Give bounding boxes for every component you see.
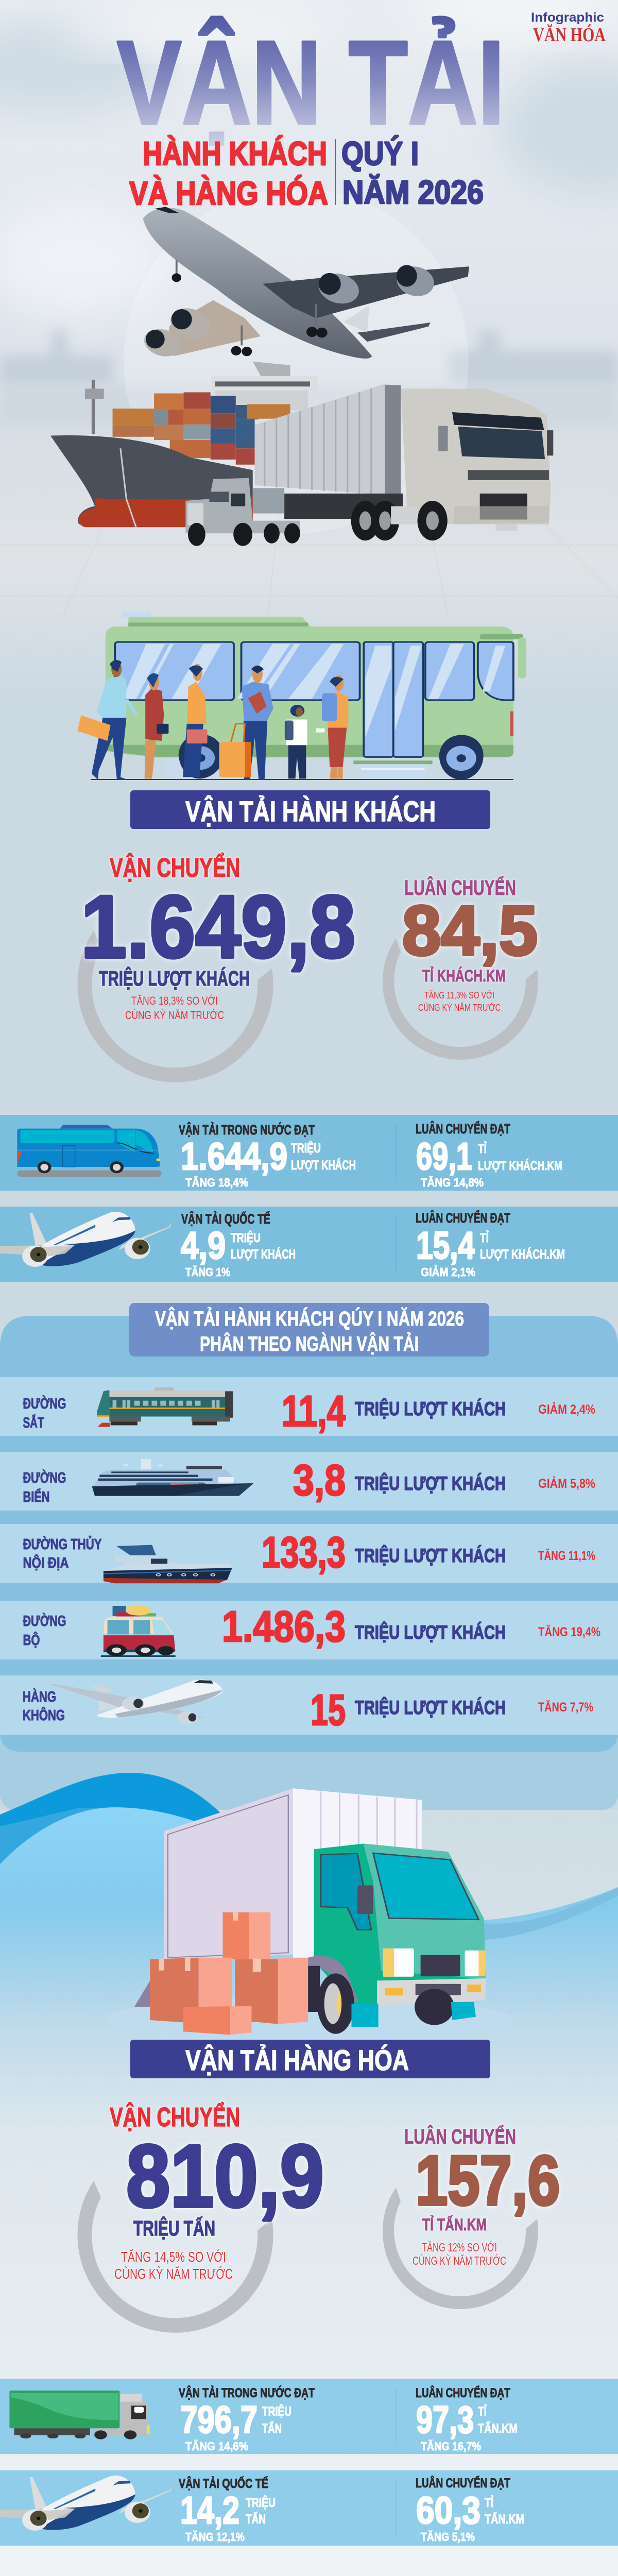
logo: Infographic Văn Hóa	[531, 10, 606, 46]
band: international passenger transport: TRIỆU	[231, 1230, 261, 1245]
band: domestic passenger transport: TỈ	[478, 1141, 487, 1156]
hero background	[0, 0, 618, 701]
section header: passenger transport: VẬN TẢI HÀNH KHÁCH	[185, 795, 436, 827]
subtitle: passengers and goods: VÀ HÀNG HÓA	[129, 175, 328, 212]
illustration: delivery truck with boxes	[134, 1788, 486, 2035]
icon: jet airliner	[0, 2476, 171, 2531]
icon: van	[101, 1605, 176, 1657]
section header: freight transport	[130, 2040, 490, 2078]
row: road: BỘ	[23, 1631, 40, 1649]
stat: freight volume: VẬN CHUYỂN	[110, 2102, 240, 2132]
band: domestic passenger transport: LUÂN CHUYỂN ĐẠT	[416, 1121, 510, 1137]
stat: freight turnover: TỈ TẤN.KM	[422, 2215, 487, 2234]
subtitle: period: QUÝ I	[341, 135, 419, 172]
band: international passenger transport: TỈ	[480, 1230, 489, 1245]
ring: passenger turnover	[383, 938, 538, 1060]
ring: freight turnover	[383, 2188, 538, 2309]
woman in red	[145, 673, 168, 778]
panel heading: PHÂN THEO NGÀNH VẬN TẢI	[200, 1332, 419, 1355]
illustration: container truck	[255, 384, 553, 540]
stat: freight turnover: 157,6	[416, 2141, 560, 2219]
band: domestic passenger transport: LƯỢT KHÁCH	[291, 1158, 356, 1173]
section header: passenger transport	[130, 790, 490, 829]
ring: freight volume	[78, 2181, 273, 2333]
stat: passenger volume	[81, 853, 355, 1022]
illustration: green bus with passengers	[77, 612, 526, 780]
title: VẬN TẢI	[117, 16, 505, 149]
band: domestic freight transport: 97,3	[416, 2398, 474, 2441]
row: railway: GIẢM 2,4%	[538, 1401, 595, 1417]
band: international passenger transport	[0, 1207, 618, 1282]
row: sea	[0, 1452, 618, 1511]
band: domestic passenger transport: 1.644,9	[181, 1135, 287, 1178]
band: international passenger transport: GIẢM 2,1%	[421, 1264, 475, 1279]
band: international passenger transport: LUÂN CHUYỂN ĐẠT	[416, 1210, 510, 1226]
logo: Infographic Văn Hóa: Infographic	[531, 10, 604, 25]
illustration: container ship	[50, 362, 318, 528]
stat: passenger volume: 1.649,8	[81, 877, 355, 976]
row: inland waterway: ĐƯỜNG THỦY	[23, 1535, 102, 1553]
stat: freight volume	[110, 2102, 324, 2282]
band: international freight transport	[0, 2470, 618, 2546]
row: sea: 3,8	[293, 1456, 346, 1504]
section header: freight transport: VẬN TẢI HÀNG HÓA	[185, 2044, 409, 2076]
subtitle: passengers and goods: HÀNH KHÁCH	[143, 135, 327, 172]
band: international freight transport: 60,3	[416, 2489, 480, 2532]
stat: freight volume: CÙNG KỲ NĂM TRƯỚC	[114, 2266, 233, 2282]
child with backpack	[285, 705, 307, 778]
boxes	[150, 1912, 308, 2035]
band: international passenger transport: LƯỢT KHÁCH.KM	[480, 1247, 565, 1262]
stat: passenger turnover: CÙNG KỲ NĂM TRƯỚC	[418, 1002, 501, 1013]
band: domestic freight transport: TỈ	[478, 2403, 487, 2419]
row: aviation	[0, 1675, 618, 1735]
row: road	[0, 1601, 618, 1659]
illustration: cargo airplane	[140, 207, 469, 361]
row: railway: SẮT	[23, 1414, 44, 1431]
band: domestic passenger transport	[0, 1115, 618, 1191]
row: aviation: TĂNG 7,7%	[538, 1700, 593, 1715]
subtitle: period	[341, 135, 484, 211]
icon: train	[97, 1387, 233, 1427]
band: domestic freight transport: 796,7	[180, 2398, 258, 2441]
row: road: 1.486,3	[222, 1602, 346, 1651]
row: road: TĂNG 19,4%	[538, 1624, 600, 1639]
ring: passenger volume	[78, 930, 273, 1082]
row: aviation: 15	[311, 1686, 346, 1734]
band: domestic freight transport: VẬN TẢI TRONG NƯỚC ĐẠT	[179, 2385, 315, 2400]
stat: passenger volume: VẬN CHUYỂN	[110, 853, 240, 883]
band: domestic freight transport: LUÂN CHUYỂN ĐẠT	[416, 2385, 510, 2400]
band: domestic freight transport: TẤN	[262, 2421, 282, 2436]
band: international passenger transport: 15,4	[416, 1224, 475, 1267]
subtitle: passengers and goods	[129, 135, 328, 212]
row: road: ĐƯỜNG	[23, 1612, 66, 1630]
stat: freight volume: 810,9	[126, 2127, 324, 2226]
row: railway: 11,4	[282, 1387, 346, 1435]
stat: passenger volume: TRIỆU LƯỢT KHÁCH	[99, 967, 250, 990]
stat: passenger volume: TĂNG 18,3% SO VỚI	[131, 994, 218, 1007]
stat: passenger turnover: LUÂN CHUYỂN	[404, 875, 516, 900]
row: road: TRIỆU LƯỢT KHÁCH	[355, 1621, 506, 1643]
man with red bag	[183, 664, 208, 777]
row: aviation: TRIỆU LƯỢT KHÁCH	[355, 1697, 506, 1718]
band: international passenger transport: LƯỢT KHÁCH	[231, 1247, 296, 1262]
stat: passenger turnover: 84,5	[402, 891, 538, 970]
woman with backpack	[316, 675, 348, 778]
band: international freight transport: LUÂN CHUYỂN ĐẠT	[416, 2475, 510, 2490]
band: domestic freight transport: TĂNG 14,6%	[185, 2439, 248, 2453]
row: inland waterway: 133,3	[262, 1528, 346, 1577]
band: international freight transport: TẤN	[246, 2512, 266, 2527]
row: sea: BIỂN	[23, 1488, 49, 1505]
band: domestic passenger transport: TĂNG 18,4%	[185, 1175, 248, 1189]
stat: passenger turnover	[402, 875, 538, 1013]
row: sea: ĐƯỜNG	[23, 1469, 66, 1486]
band: international freight transport: TỈ	[485, 2495, 493, 2510]
icon: cruise ship	[92, 1459, 253, 1496]
stat: freight volume: TRIỆU TẤN	[133, 2216, 215, 2240]
stat: freight turnover	[404, 2124, 560, 2267]
band: international passenger transport: 4,9	[181, 1224, 226, 1267]
band: domestic freight transport	[0, 2379, 618, 2454]
icon: jet airliner	[0, 1212, 171, 1267]
icon: blue coach	[17, 1125, 161, 1177]
stat: passenger turnover: TĂNG 11,3% SO VỚI	[424, 990, 494, 1001]
band: domestic passenger transport: VẬN TẢI TRONG NƯỚC ĐẠT	[179, 1121, 315, 1138]
band: domestic passenger transport: TRIỆU	[291, 1140, 321, 1156]
icon: green truck	[9, 2391, 150, 2439]
band: domestic passenger transport: LƯỢT KHÁCH.KM	[478, 1158, 562, 1173]
panel: passengers by transport mode	[0, 1303, 618, 1752]
band: international passenger transport: VẬN TẢI QUỐC TẾ	[181, 1210, 270, 1227]
band: domestic freight transport: TẤN.KM	[478, 2421, 518, 2436]
band: domestic freight transport: TĂNG 16,7%	[421, 2439, 481, 2453]
stat: freight turnover: LUÂN CHUYỂN	[404, 2124, 516, 2148]
icon: yacht	[104, 1545, 232, 1583]
panel heading: VẬN TẢI HÀNH KHÁCH QÚY I NĂM 2026	[155, 1307, 464, 1330]
row: aviation: HÀNG	[23, 1688, 56, 1705]
man with luggage and folder	[219, 665, 273, 779]
cargo section background with waves	[0, 1752, 618, 2576]
passenger background strip below panel	[0, 1700, 618, 1810]
row: inland waterway: TĂNG 11,1%	[538, 1548, 595, 1563]
illustration: small truck	[185, 478, 300, 546]
stat: passenger turnover: TỈ KHÁCH.KM	[422, 967, 506, 985]
band: international freight transport: TẤN.KM	[485, 2512, 524, 2527]
band: international passenger transport: TĂNG 1%	[185, 1265, 230, 1279]
stat: passenger volume: CÙNG KỲ NĂM TRƯỚC	[125, 1009, 224, 1022]
row: sea: TRIỆU LƯỢT KHÁCH	[355, 1472, 506, 1494]
band: international freight transport: TĂNG 5,1%	[421, 2530, 475, 2544]
row: inland waterway: TRIỆU LƯỢT KHÁCH	[355, 1545, 506, 1566]
band: international freight transport: VẬN TẢI QUỐC TẾ	[179, 2476, 268, 2491]
title	[117, 16, 505, 212]
row: railway: TRIỆU LƯỢT KHÁCH	[355, 1398, 506, 1419]
row: aviation: KHÔNG	[23, 1706, 65, 1724]
row: railway: ĐƯỜNG	[23, 1395, 66, 1412]
row: railway	[0, 1377, 618, 1436]
row: sea: GIẢM 5,8%	[538, 1476, 595, 1491]
stat: freight turnover: TĂNG 12% SO VỚI	[422, 2241, 497, 2254]
band: international freight transport: TĂNG 12,1%	[185, 2530, 245, 2544]
row: inland waterway	[0, 1524, 618, 1583]
icon: airplane	[49, 1680, 222, 1724]
band: domestic passenger transport: TĂNG 14,8%	[421, 1175, 484, 1189]
band: domestic freight transport: TRIỆU	[262, 2403, 291, 2419]
panel heading	[129, 1303, 489, 1357]
band: domestic passenger transport: 69,1	[416, 1135, 472, 1178]
stat: freight volume: TĂNG 14,5% SO VỚI	[121, 2249, 226, 2265]
band: international freight transport: TRIỆU	[246, 2495, 276, 2510]
band: international freight transport: 14,2	[180, 2489, 239, 2532]
person with orange suitcase	[77, 660, 136, 779]
stat: freight turnover: CÙNG KỲ NĂM TRƯỚC	[413, 2254, 506, 2267]
subtitle: period: NĂM 2026	[342, 174, 484, 211]
row: inland waterway: NỘI ĐỊA	[23, 1554, 69, 1571]
